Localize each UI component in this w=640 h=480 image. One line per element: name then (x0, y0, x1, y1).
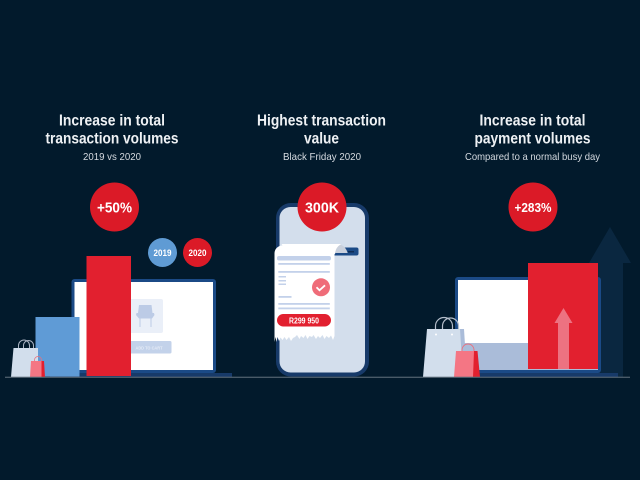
button: add to cart: ADD TO CART (136, 346, 163, 350)
legend: 2019 (148, 238, 177, 267)
bar: 2019 (36, 317, 80, 376)
icon: laptop (50, 279, 232, 377)
legend: 2020: 2020 (188, 248, 206, 258)
icon: small shopping bag (454, 344, 480, 377)
heading: payment volumes: Increase in total (480, 112, 586, 130)
badge: +283% (508, 182, 558, 232)
panel: payment volumes (423, 112, 631, 377)
icon: large shopping bag (11, 340, 38, 377)
receipt curl (335, 244, 348, 253)
legend: 2019: 2019 (154, 248, 172, 258)
heading: transaction volumes: transaction volumes (46, 130, 178, 147)
bar: 2020 (86, 256, 131, 376)
panel: highest transaction value (257, 112, 386, 376)
heading: transaction volumes: Increase in total (59, 112, 165, 130)
bar: payment volume (528, 263, 598, 369)
heading: transaction volumes (46, 112, 178, 147)
receipt (274, 244, 348, 342)
heading: payment volumes: payment volumes (474, 130, 590, 147)
subheading: 2019 vs 2020: 2019 vs 2020 (83, 151, 141, 163)
heading: highest transaction value: Highest transaction (257, 112, 386, 130)
heading: highest transaction value: value (304, 130, 339, 147)
icon: laptop (430, 277, 618, 377)
arrow up in bar (554, 308, 572, 369)
subheading: Black Friday 2020: Black Friday 2020 (283, 151, 361, 163)
legend: 2020 (183, 238, 212, 267)
icon: large shopping bag (423, 318, 467, 377)
panel: transaction volumes (11, 112, 232, 377)
heading: payment volumes (474, 112, 590, 147)
badge: +50% (90, 182, 139, 232)
badge: 300K (298, 182, 346, 232)
amount pill: R299 950 (289, 316, 319, 325)
ground line (5, 377, 630, 378)
badge: +283%: +283% (514, 201, 552, 215)
heading: highest transaction value (257, 112, 386, 147)
receipt lines (277, 256, 331, 309)
icon: small shopping bag (30, 356, 45, 377)
subheading: compared to a normal busy day: Compared to a normal busy day (465, 151, 601, 163)
badge: 300K: 300K (305, 200, 339, 216)
badge: +50%: +50% (97, 200, 132, 216)
icon: check mark (312, 278, 330, 296)
icon: phone (276, 203, 369, 376)
product card: chair (124, 299, 163, 333)
button: add to cart (126, 341, 172, 354)
background arrow (589, 227, 631, 377)
